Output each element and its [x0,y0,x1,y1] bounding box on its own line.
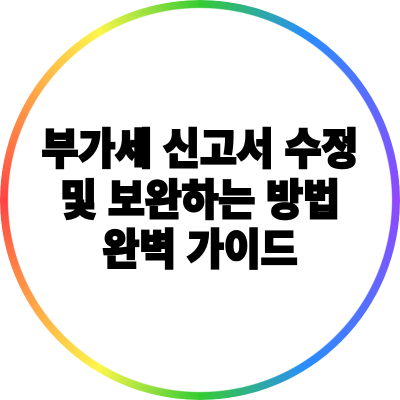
title: 완벽 가이드 [102,228,298,274]
title: 부가세 신고서 수정 [42,127,358,173]
title: 및 보완하는 방법 [60,177,340,224]
title [42,126,358,274]
